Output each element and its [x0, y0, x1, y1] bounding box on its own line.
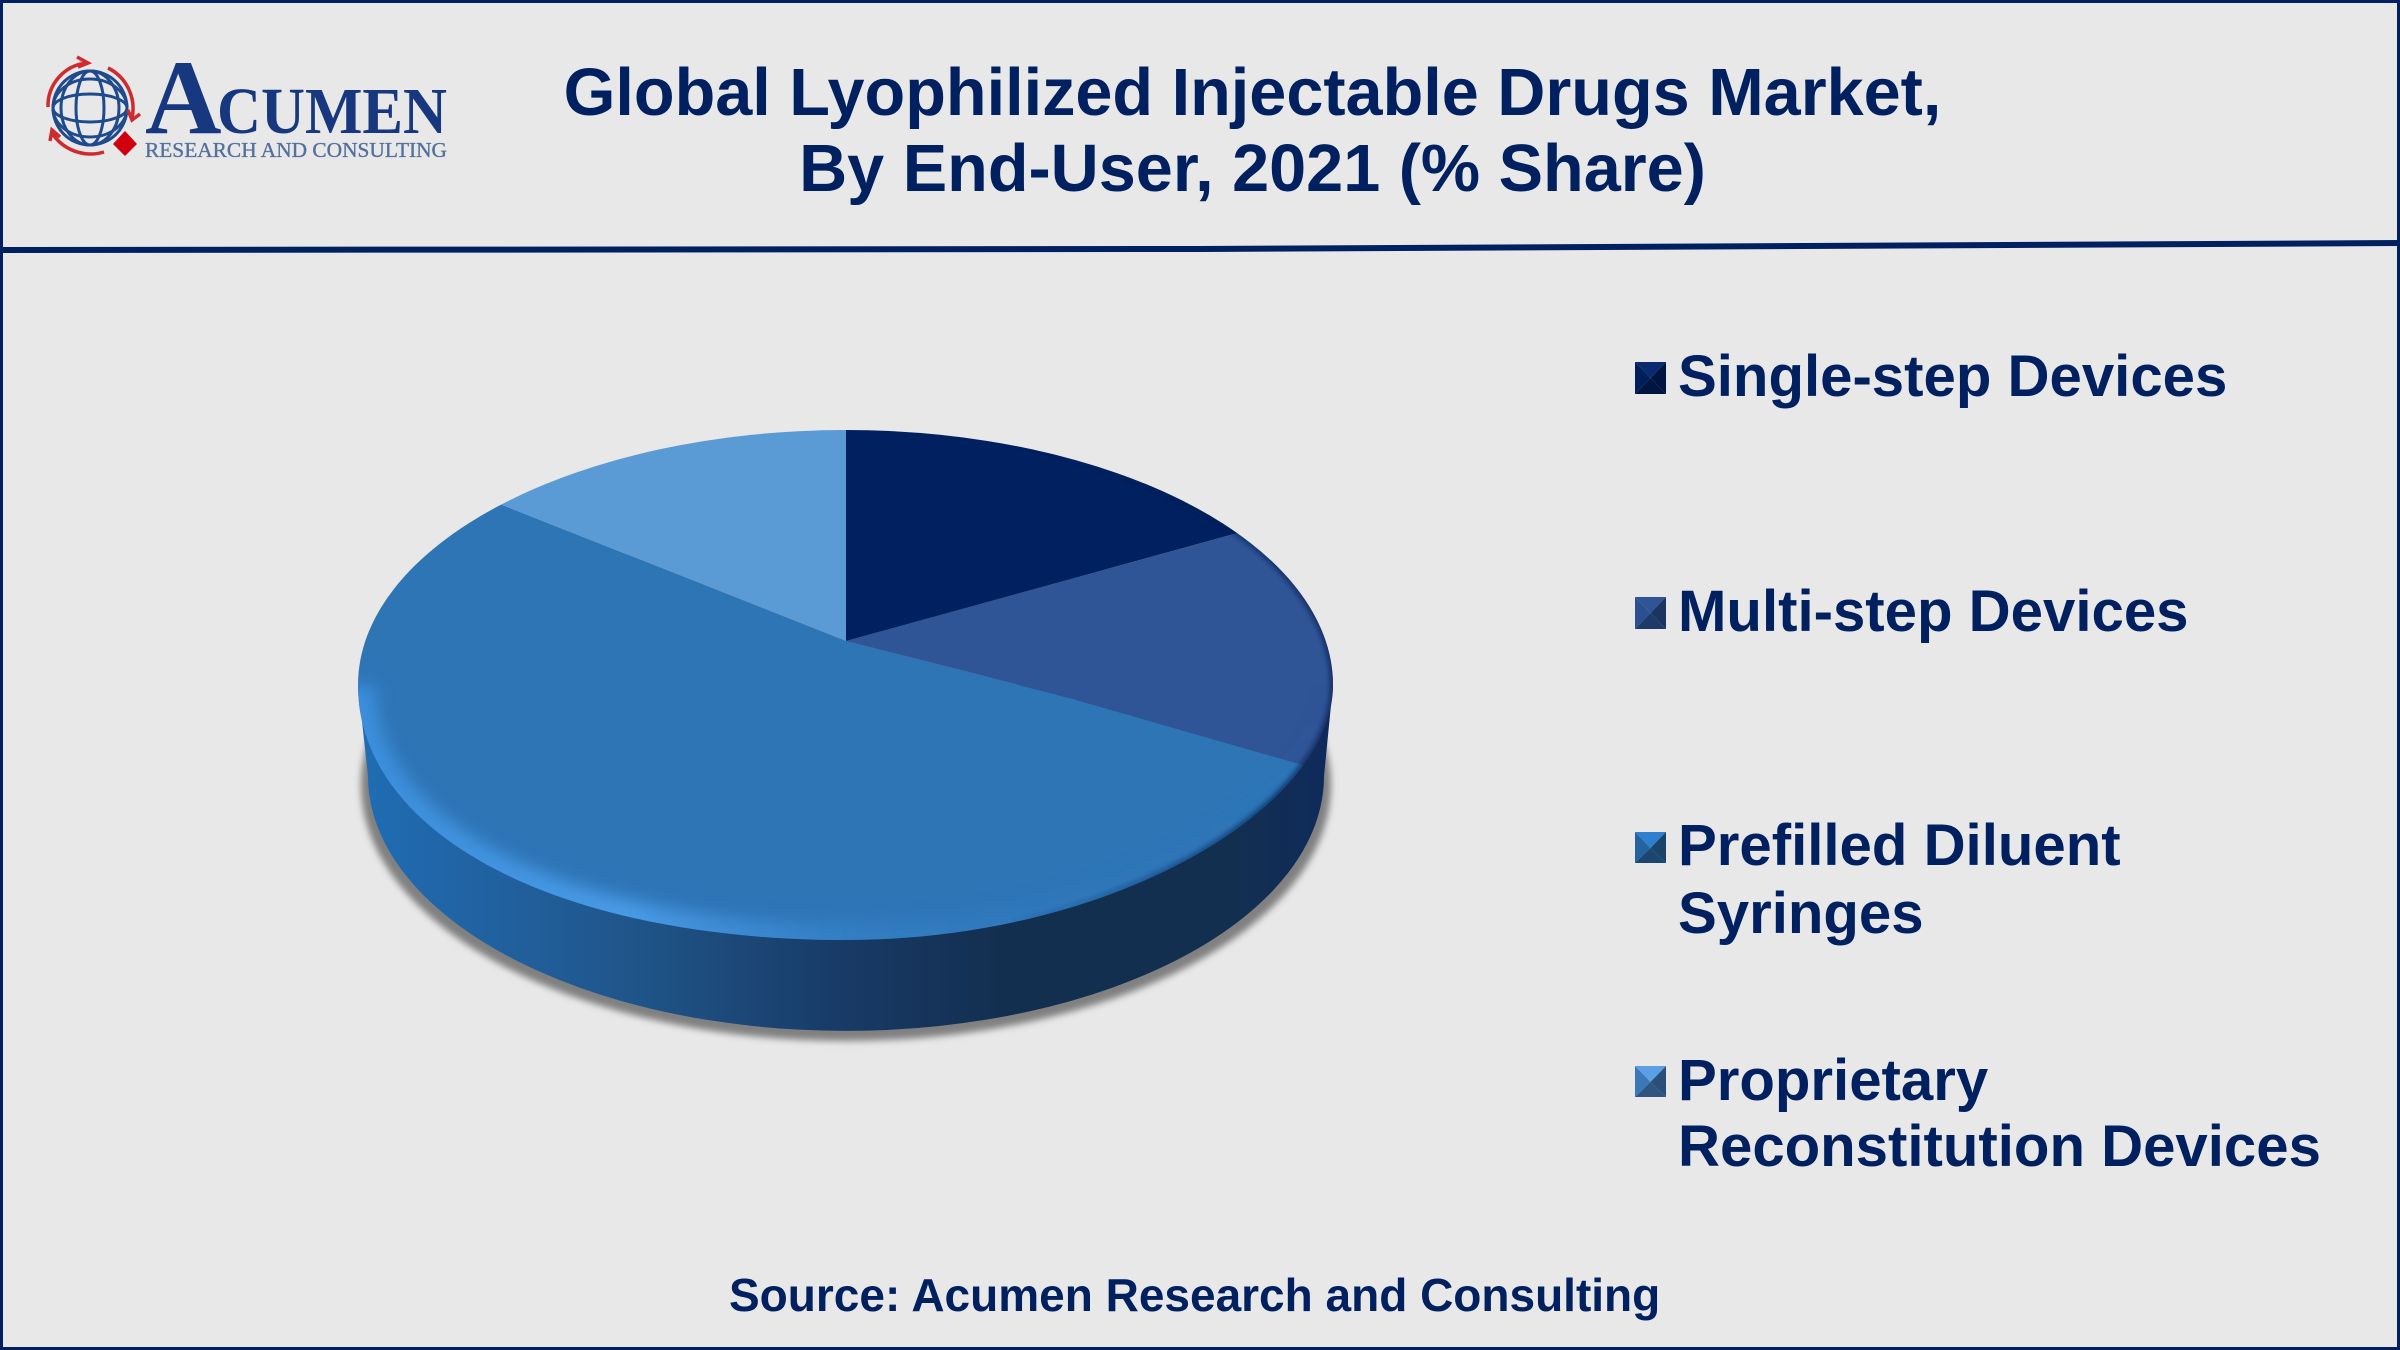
legend item: Single-step Devices: Single-step Devices — [1678, 344, 2227, 409]
legend item: Proprietary Reconstitution Devices: Reconstitution Devices — [1678, 1114, 2321, 1179]
title: By End-User, 2021 (% Share) — [799, 132, 1706, 206]
icon: globe — [53, 71, 127, 145]
icon: red diamond — [113, 131, 137, 156]
legend item: Prefilled Diluent Syringes: Prefilled Diluent — [1678, 813, 2121, 878]
pie drop shadow — [361, 529, 1331, 1041]
title: Global Lyophilized Injectable Drugs Market, — [564, 56, 1941, 130]
logo wordmark: A — [145, 39, 222, 156]
pie side wall — [358, 685, 1333, 1031]
legend item: Proprietary Reconstitution Devices: Proprietary — [1678, 1048, 1989, 1113]
3D pie chart — [356, 430, 1336, 1046]
pie edge dark bevel — [1035, 460, 1333, 917]
pie edge highlight bevel — [358, 680, 1062, 940]
legend item: Multi-step Devices: Multi-step Devices — [1678, 579, 2188, 644]
slice: Multi-step Devices — [846, 533, 1333, 765]
header divider line — [0, 240, 2400, 253]
source note: Source: Acumen Research and Consulting — [729, 1269, 1660, 1321]
slice: Prefilled Diluent Syringes — [358, 504, 1304, 940]
pie top face — [358, 430, 1333, 940]
logo wordmark: CUMEN — [217, 75, 447, 148]
legend item: Prefilled Diluent Syringes: Syringes — [1678, 881, 1924, 946]
legend item: Proprietary Reconstitution Devices — [1635, 1048, 2321, 1179]
slice: Single-step Devices — [846, 430, 1238, 641]
logo tagline: RESEARCH AND CONSULTING — [145, 138, 447, 162]
legend — [1635, 344, 2321, 1179]
logo: Acumen Research and Consulting — [48, 39, 447, 162]
slice: Proprietary Reconstitution Devices — [502, 430, 846, 641]
icon: red circular arrows — [48, 57, 140, 154]
legend item: Prefilled Diluent Syringes — [1635, 813, 2121, 946]
